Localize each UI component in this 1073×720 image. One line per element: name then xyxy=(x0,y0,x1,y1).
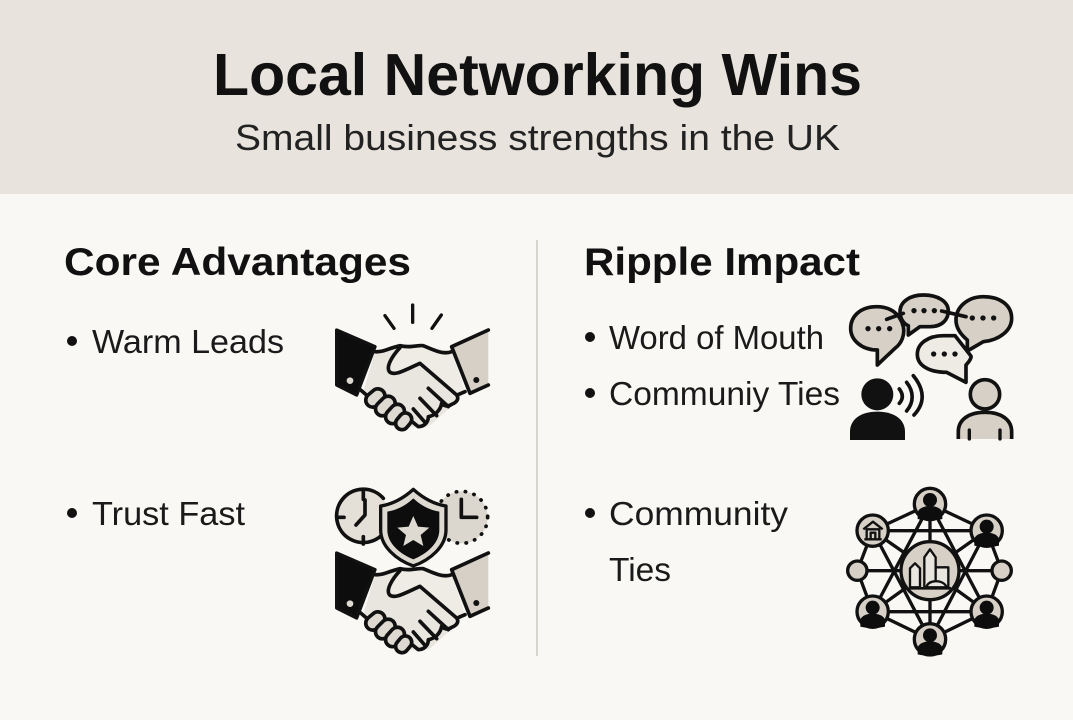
bullet: trust fast: Trust Fast xyxy=(92,495,245,532)
icon: clock xyxy=(337,489,390,544)
icon: conversation bubbles and people xyxy=(850,295,1012,440)
icon: clocks and shield over handshake xyxy=(337,489,488,655)
icon: handshake with spark lines xyxy=(337,305,488,432)
heading: ripple impact: Ripple Impact xyxy=(584,241,860,284)
bullet: community ties: Ties xyxy=(609,551,671,588)
icon: shield with star xyxy=(381,489,446,566)
panel: core advantages xyxy=(64,241,488,655)
icon: handshake xyxy=(337,553,488,655)
header band xyxy=(0,0,1073,194)
icon: community network xyxy=(848,488,1011,656)
bullet: community ties: Community xyxy=(609,495,789,532)
icon: dotted clock xyxy=(436,491,488,543)
bullet: communiy ties: Communiy Ties xyxy=(609,375,840,412)
title: Local Networking Wins xyxy=(213,42,862,108)
bullet: warm leads: Warm Leads xyxy=(92,323,284,360)
heading: core advantages: Core Advantages xyxy=(64,241,411,284)
subtitle: Small business strengths in the UK xyxy=(235,117,840,158)
bullet: community ties xyxy=(585,495,789,588)
bullet: word of mouth: Word of Mouth xyxy=(609,319,824,356)
panel: ripple impact xyxy=(584,241,1012,656)
